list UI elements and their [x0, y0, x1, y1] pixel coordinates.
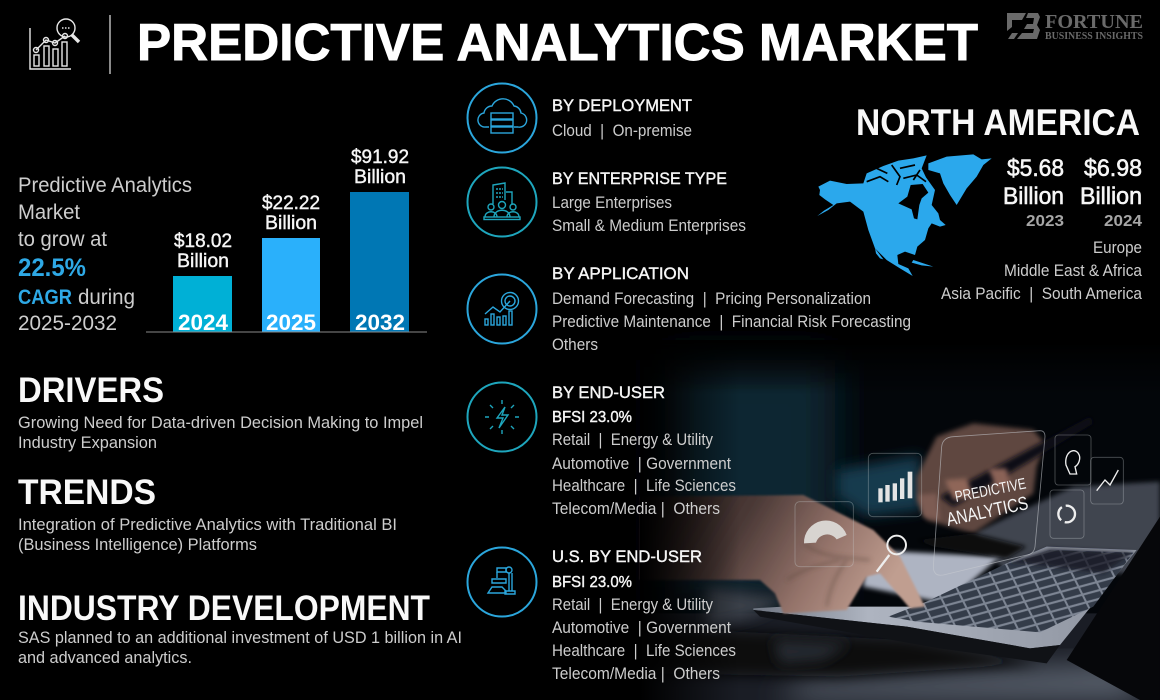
dark foreground corner	[1067, 517, 1160, 700]
logo: BUSINESS INSIGHTS	[1045, 31, 1143, 42]
by end-user	[552, 383, 736, 518]
by deployment: Cloud | On-premise	[552, 121, 692, 140]
growth statement: to grow at	[18, 228, 107, 251]
header icon: chart with magnifier	[30, 19, 79, 69]
background photo: hands on laptop	[640, 340, 1160, 700]
U.S. by end-user: Retail | Energy & Utility	[552, 595, 713, 614]
holographic panels	[795, 431, 1123, 575]
icon: enterprise buildings	[468, 168, 536, 236]
by enterprise type: Large Enterprises	[552, 193, 672, 212]
by deployment: BY DEPLOYMENT	[552, 96, 692, 115]
bar chart: $18.02	[174, 231, 232, 252]
by end-user: Retail | Energy & Utility	[552, 430, 713, 449]
by enterprise type: BY ENTERPRISE TYPE	[552, 169, 727, 188]
by application	[552, 264, 911, 354]
laptop	[753, 547, 1137, 648]
logo	[1007, 11, 1143, 42]
far hand	[917, 423, 1045, 533]
bar chart: Billion	[354, 167, 406, 188]
growth statement: CAGR	[18, 286, 72, 309]
by end-user: Automotive | Government	[552, 454, 731, 473]
industry development: SAS planned to an additional investment of USD 1 billion in AI	[18, 628, 462, 647]
bar chart: Billion	[177, 251, 229, 272]
U.S. by end-user: Automotive | Government	[552, 618, 731, 637]
icon: end-user machine	[468, 548, 536, 616]
by end-user: Healthcare | Life Sciences	[552, 476, 736, 495]
2023 and 2024 values: 2024	[1104, 213, 1142, 230]
growth statement: during	[78, 286, 135, 309]
2023 and 2024 values: Billion	[1080, 183, 1142, 210]
bar chart: $22.22	[262, 193, 320, 214]
title: PREDICTIVE ANALYTICS MARKET	[137, 14, 978, 72]
2023 and 2024 values: $6.98	[1084, 155, 1142, 182]
sleeve	[837, 455, 923, 517]
growth statement: Market	[18, 201, 80, 224]
drivers: Growing Need for Data-driven Decision Making to Impel	[18, 413, 423, 432]
other regions: Europe	[1093, 238, 1142, 257]
by application: Demand Forecasting | Pricing Personalization	[552, 289, 871, 308]
growth statement: Predictive Analytics	[18, 174, 192, 197]
icon: analytics target	[468, 274, 536, 344]
other regions: Middle East & Africa	[1004, 261, 1142, 280]
growth statement: 22.5%	[18, 254, 86, 282]
logo: FORTUNE	[1045, 11, 1143, 33]
bar chart	[146, 147, 427, 335]
by end-user: BY END-USER	[552, 383, 665, 402]
drivers	[18, 371, 423, 452]
industry development	[18, 589, 462, 667]
drivers: DRIVERS	[18, 371, 164, 410]
near hand	[640, 495, 925, 613]
map of North America	[817, 154, 992, 276]
2023 and 2024 values: Billion	[1003, 183, 1064, 210]
gauge and lens	[804, 520, 847, 543]
trends: Integration of Predictive Analytics with Traditional BI	[18, 515, 397, 534]
by application: Predictive Maintenance | Financial Risk Forecasting	[552, 312, 911, 331]
desk	[640, 613, 1160, 700]
header divider	[109, 15, 111, 74]
holographic bars	[878, 472, 912, 502]
by end-user: BFSI 23.0%	[552, 409, 632, 426]
industry development: and advanced analytics.	[18, 648, 192, 667]
photo caption: ANALYTICS	[945, 493, 1030, 531]
U.S. by end-user	[552, 547, 736, 683]
bar chart: 2025	[266, 310, 316, 335]
drivers: Industry Expansion	[18, 433, 157, 452]
region heading: NORTH AMERICA	[856, 102, 1140, 143]
trends	[18, 473, 397, 554]
other regions: Asia Pacific | South America	[941, 284, 1142, 303]
bar chart: $91.92	[351, 147, 409, 168]
trends: TRENDS	[18, 473, 156, 512]
by enterprise type: Small & Medium Enterprises	[552, 216, 746, 235]
growth statement: 2025-2032	[18, 312, 117, 335]
bar chart: 2024	[178, 310, 228, 335]
industry development: INDUSTRY DEVELOPMENT	[18, 589, 430, 628]
U.S. by end-user: Healthcare | Life Sciences	[552, 641, 736, 660]
U.S. by end-user: Telecom/Media | Others	[552, 664, 720, 683]
icon: cloud servers	[468, 84, 536, 152]
2023 and 2024 values	[1003, 155, 1142, 230]
2023 and 2024 values: $5.68	[1007, 155, 1064, 182]
U.S. by end-user: BFSI 23.0%	[552, 574, 632, 591]
2023 and 2024 values: 2023	[1026, 213, 1064, 230]
trends: (Business Intelligence) Platforms	[18, 535, 257, 554]
by deployment	[552, 96, 692, 140]
growth statement	[18, 174, 192, 335]
U.S. by end-user: U.S. BY END-USER	[552, 547, 702, 566]
photo caption	[945, 476, 1030, 531]
other regions	[941, 238, 1142, 303]
by enterprise type	[552, 169, 746, 235]
icon: lightning	[468, 382, 536, 452]
photo caption: PREDICTIVE	[954, 476, 1027, 506]
by application: BY APPLICATION	[552, 264, 689, 283]
bar chart: 2032	[355, 310, 405, 335]
bright deck behind finger	[863, 550, 1000, 603]
bar chart: Billion	[265, 213, 317, 234]
by application: Others	[552, 335, 598, 354]
by end-user: Telecom/Media | Others	[552, 499, 720, 518]
